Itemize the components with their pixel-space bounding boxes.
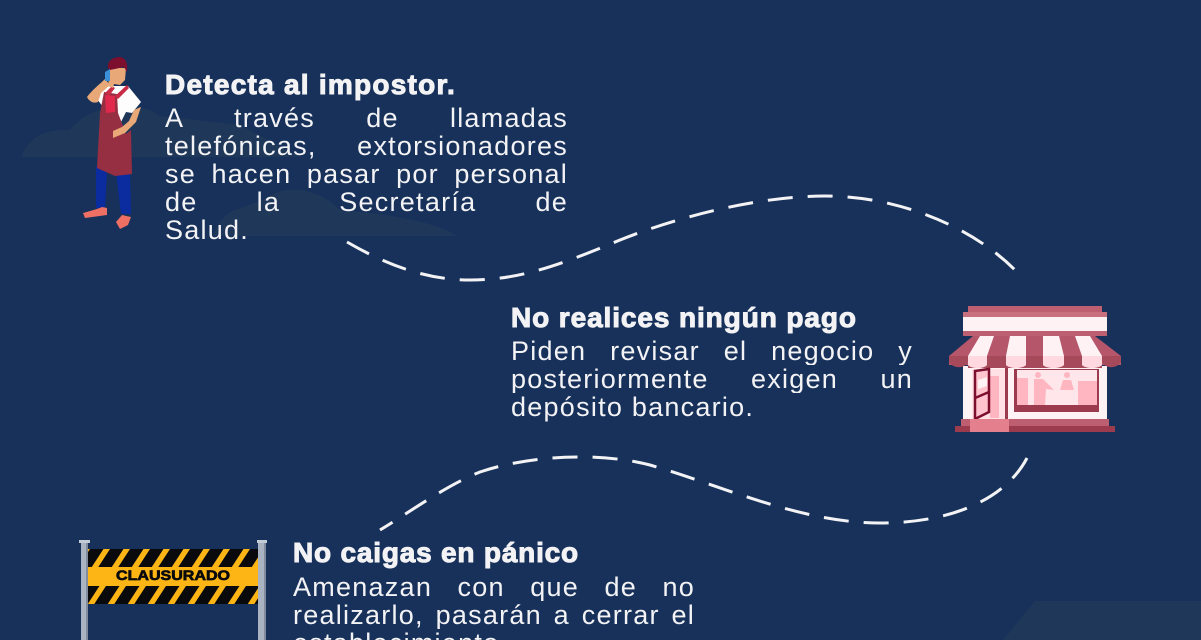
text block: no caigas en pánico xyxy=(293,537,695,640)
raised arm xyxy=(87,79,110,103)
body text: Salud. xyxy=(165,215,249,245)
head xyxy=(108,68,126,88)
apron straps and pocket xyxy=(105,85,129,99)
base xyxy=(961,419,1109,426)
people in window xyxy=(1035,372,1041,378)
body text: depósito bancario. xyxy=(511,392,754,422)
arm on hip xyxy=(113,107,141,138)
awning xyxy=(949,336,1121,365)
shoes xyxy=(83,207,107,218)
heading: No caigas en pánico xyxy=(293,537,579,568)
heading: Detecta al impostor. xyxy=(165,69,456,100)
body text xyxy=(511,337,913,422)
heading: No realices ningún pago xyxy=(511,302,857,333)
text block: no realices ningún pago xyxy=(511,302,913,422)
text block: detecta al impostor xyxy=(165,69,568,245)
body text xyxy=(293,573,695,640)
body text xyxy=(165,104,568,245)
legs xyxy=(96,166,107,208)
shirt xyxy=(94,86,141,124)
icon: closure barricade sign: CLAUSURADO xyxy=(116,567,230,583)
door xyxy=(972,369,1008,419)
apron xyxy=(97,92,132,176)
walls xyxy=(963,366,1107,422)
window xyxy=(1014,369,1099,412)
phone xyxy=(105,69,110,81)
